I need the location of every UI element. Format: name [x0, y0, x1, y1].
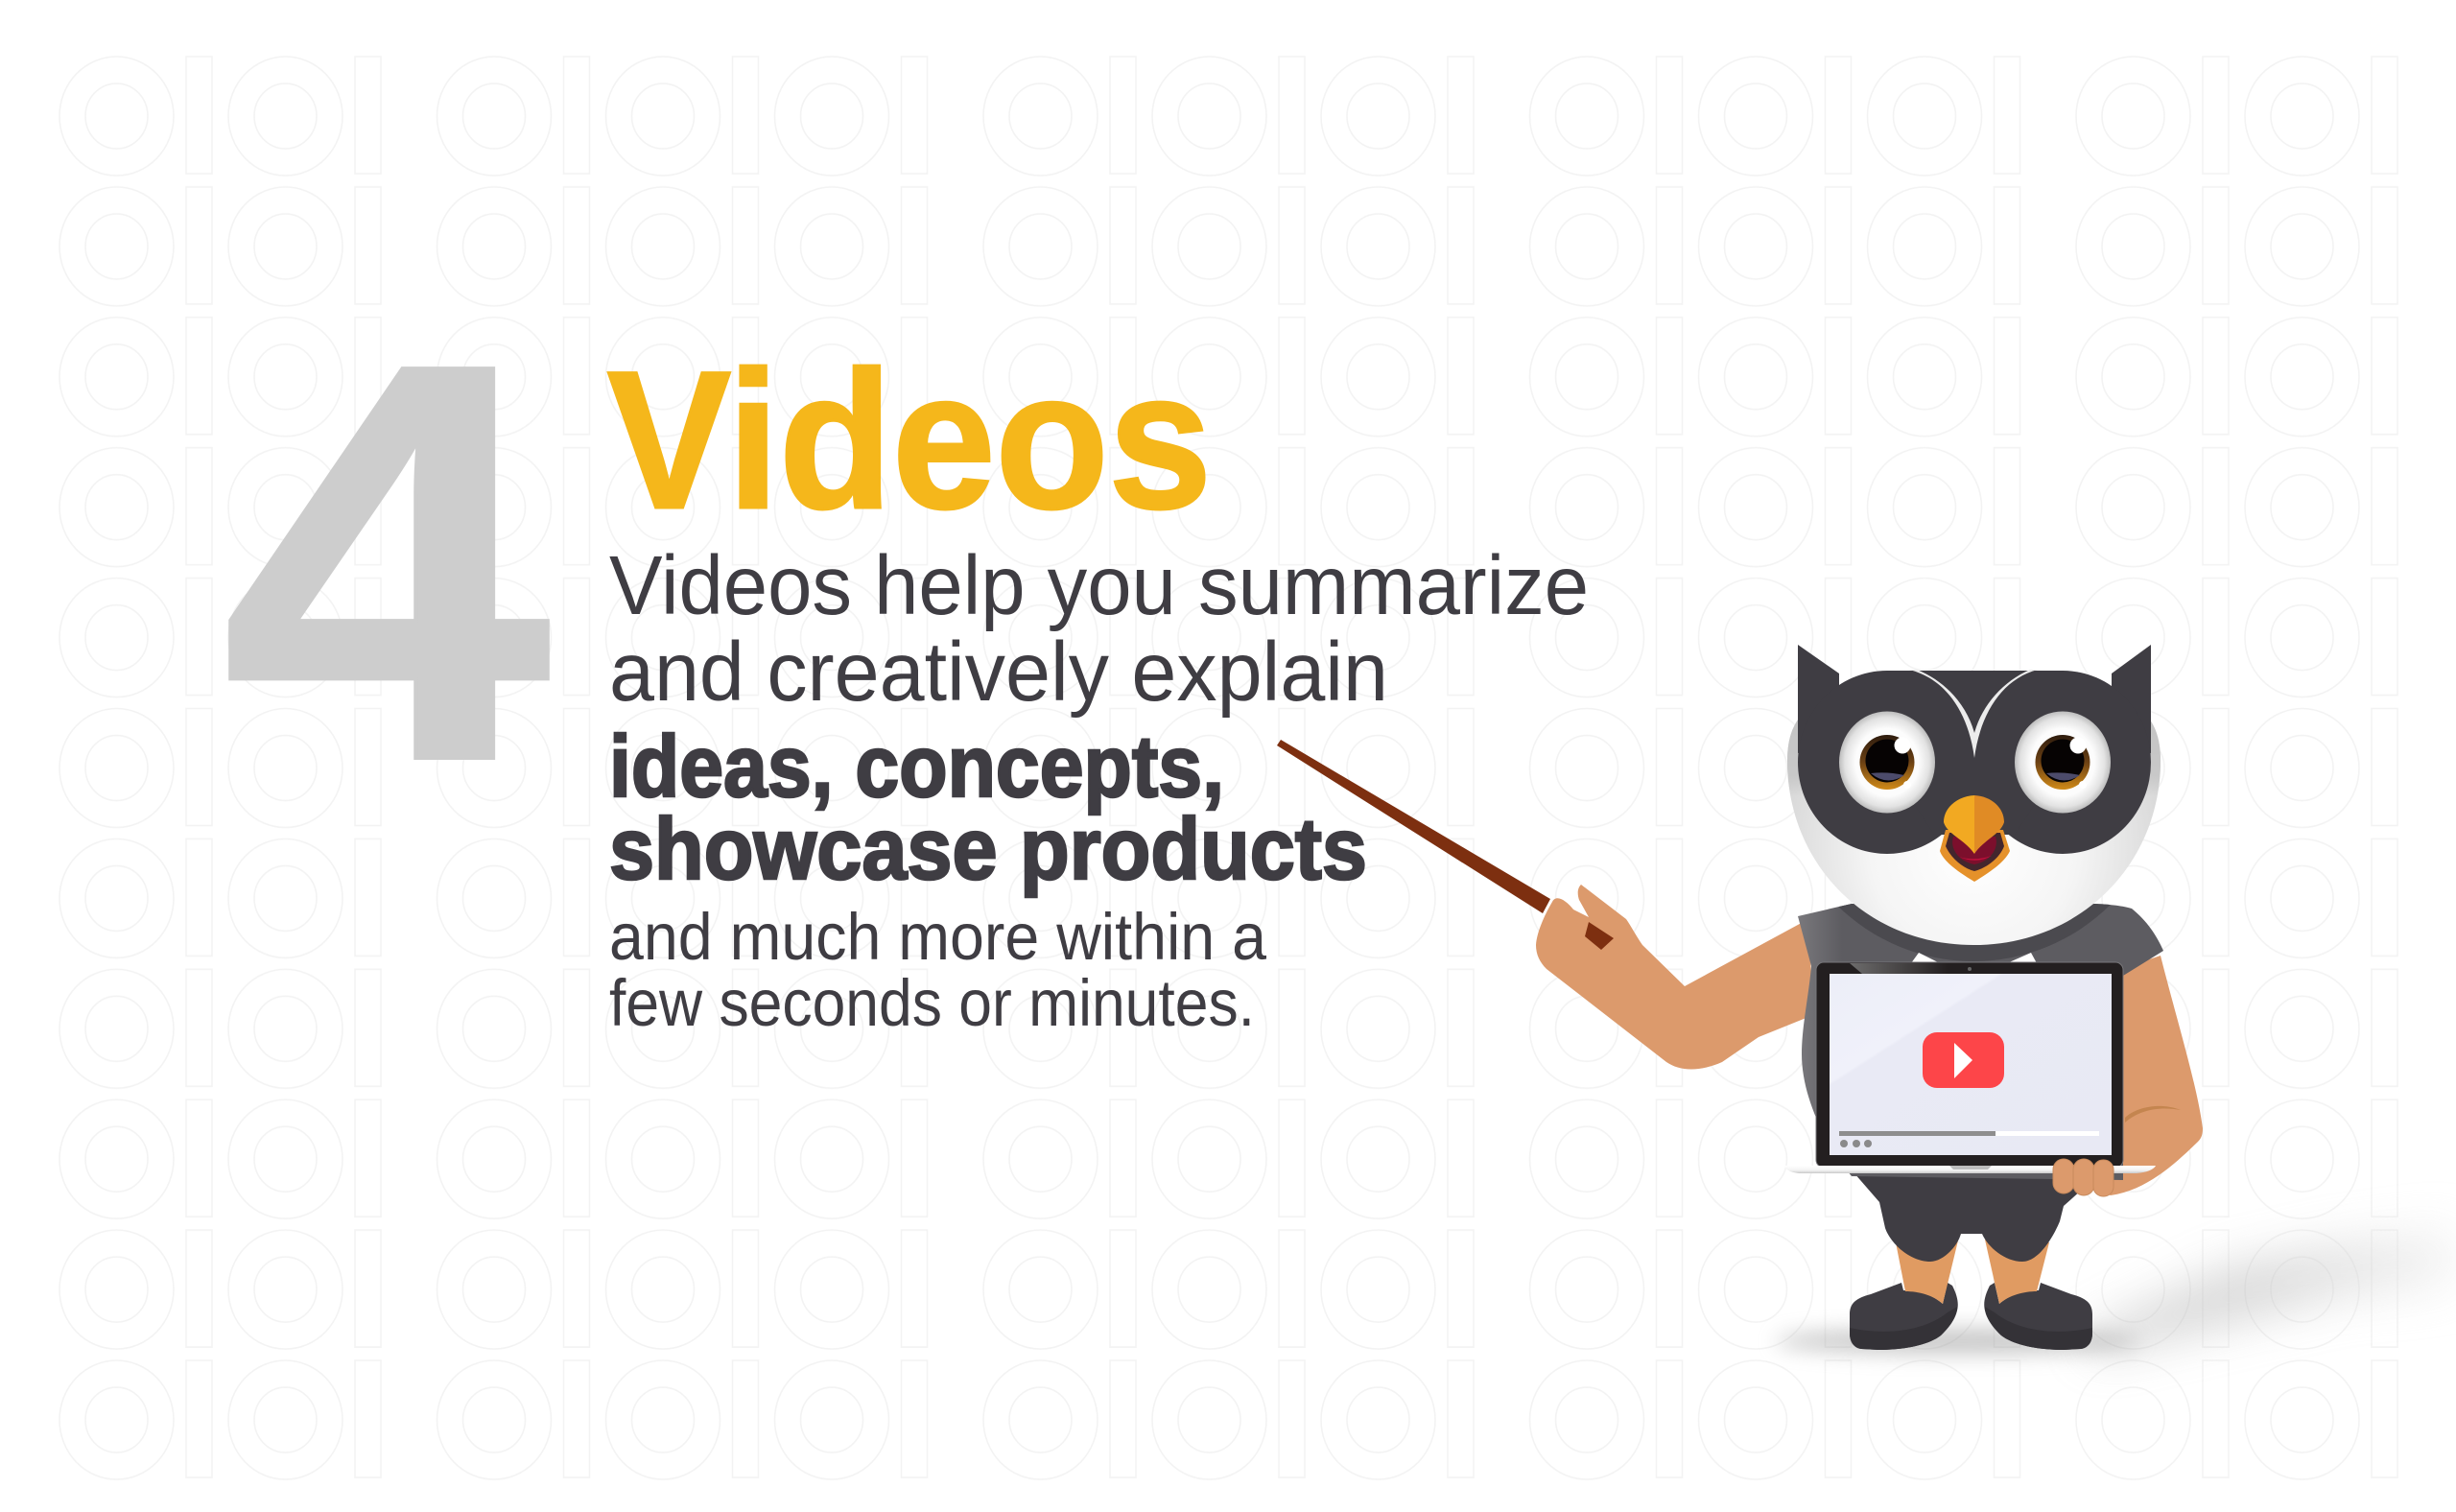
- right shoe: [1984, 1283, 2092, 1350]
- shirt: [1798, 904, 2163, 1180]
- line 5: and much more within a: [609, 900, 1267, 974]
- right arm: [2096, 956, 2203, 1195]
- legs: [1896, 1240, 2049, 1304]
- owl head: [1784, 645, 2163, 945]
- left arm and hand: [1536, 885, 1813, 1070]
- left shoe: [1850, 1283, 1958, 1350]
- owl character: [1277, 574, 2203, 1350]
- owl ground shadow: [1775, 1228, 2456, 1354]
- ears: [1798, 645, 2151, 753]
- heading: Videos: Videos: [607, 331, 1212, 550]
- line 2: and creatively explain: [609, 626, 1388, 719]
- fingers holding laptop: [2053, 1159, 2114, 1196]
- line 4: bold emphasis: showcase products: [609, 801, 1367, 898]
- stick end in hand: [1585, 922, 1614, 950]
- laptop base: [1784, 1166, 2156, 1173]
- laptop: [1784, 962, 2156, 1173]
- shorts: [1848, 1166, 2082, 1262]
- right eye: [2015, 712, 2111, 814]
- line 1: Videos help you summarize: [609, 539, 1589, 632]
- brow line: [1909, 670, 2038, 758]
- line 6: few seconds or minutes.: [609, 966, 1255, 1040]
- pointer stick: [1277, 740, 1550, 913]
- text block: description: [609, 539, 1589, 1040]
- face mask: [1798, 671, 2151, 854]
- number 4: 4: [222, 247, 555, 879]
- collar shadow: [1838, 904, 2111, 961]
- progress bar: [1839, 1131, 2099, 1136]
- player controls: [1840, 1140, 1872, 1147]
- left eye: [1839, 712, 1935, 814]
- play button: [1923, 1032, 2004, 1088]
- bow tie: [1911, 953, 2037, 963]
- line 3: bold emphasis: ideas, concepts,: [609, 719, 1224, 815]
- beak: [1940, 795, 2010, 882]
- laptop screen: [1830, 974, 2112, 1155]
